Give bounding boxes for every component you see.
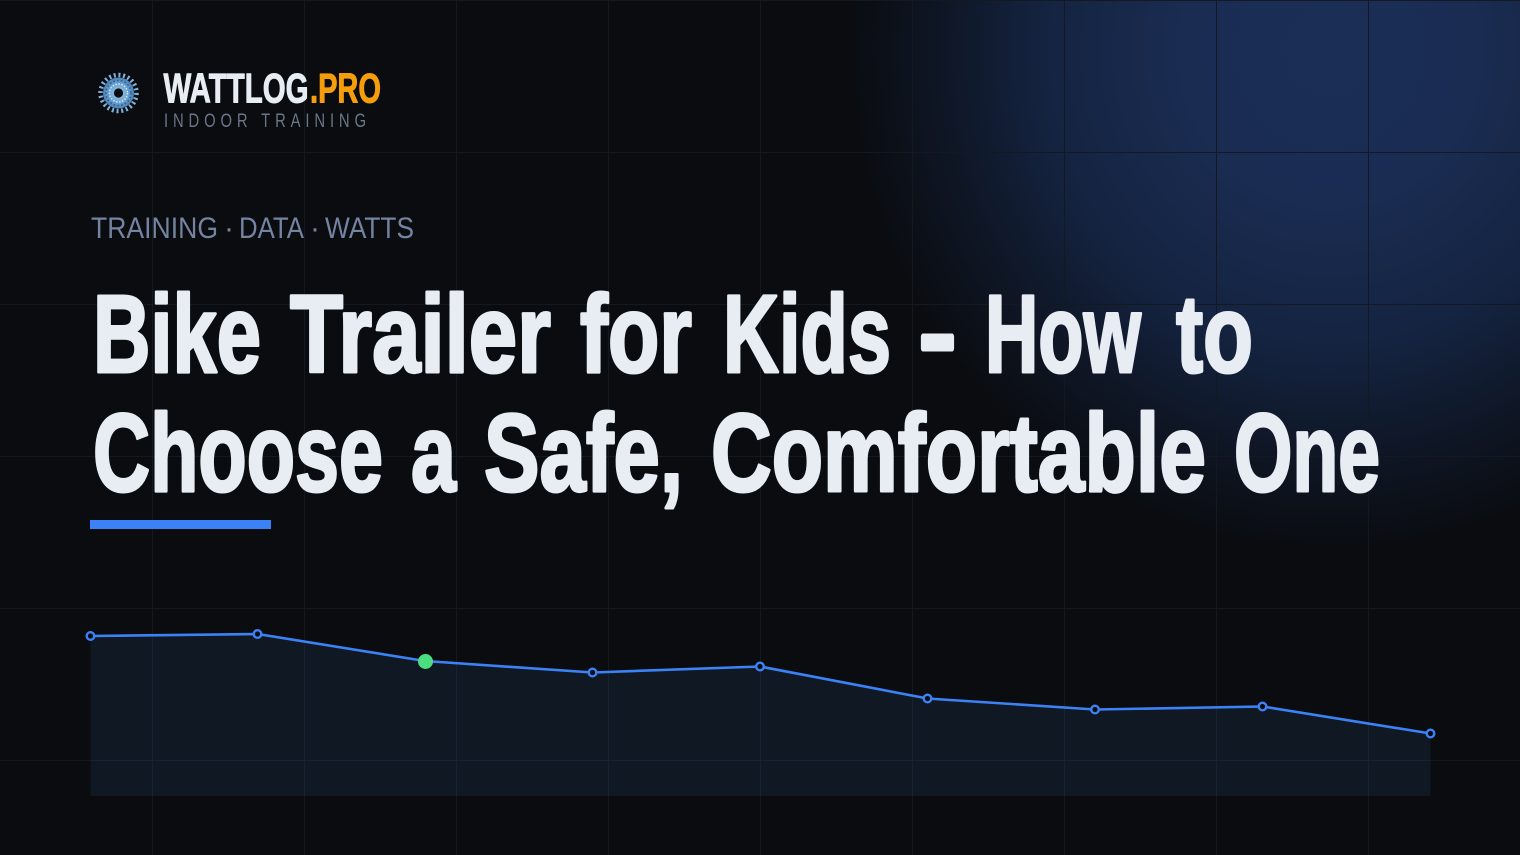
title [93,273,1380,515]
title accent underline [90,520,271,529]
title: Safe, [484,392,683,515]
logo: cassette gear icon [100,75,136,111]
title: Comfortable [711,392,1206,515]
eyebrow text: · [310,212,320,245]
title: a [411,392,457,515]
highlighted data point [418,654,433,669]
logo wordmark: WATTLOG [164,64,308,112]
title: to [1176,273,1253,396]
title: How [985,273,1141,396]
logo wordmark: .PRO [310,64,381,112]
line chart: watt trend [87,630,1434,796]
title: One [1234,392,1380,515]
eyebrow text: · [224,212,234,245]
title: for [580,273,692,396]
title: Kids [723,273,891,396]
title: Bike [93,273,261,396]
chart data points [87,630,1434,737]
title: Trailer [290,273,551,396]
chart line [90,634,1430,734]
chart area fill [90,634,1430,796]
title: – [921,273,954,396]
eyebrow text: WATTS [325,212,414,245]
logo tagline: INDOOR TRAINING [164,110,366,131]
eyebrow text [91,212,414,245]
title: Choose [93,392,383,515]
eyebrow text: TRAINING [91,212,218,245]
eyebrow text: DATA [239,212,304,245]
